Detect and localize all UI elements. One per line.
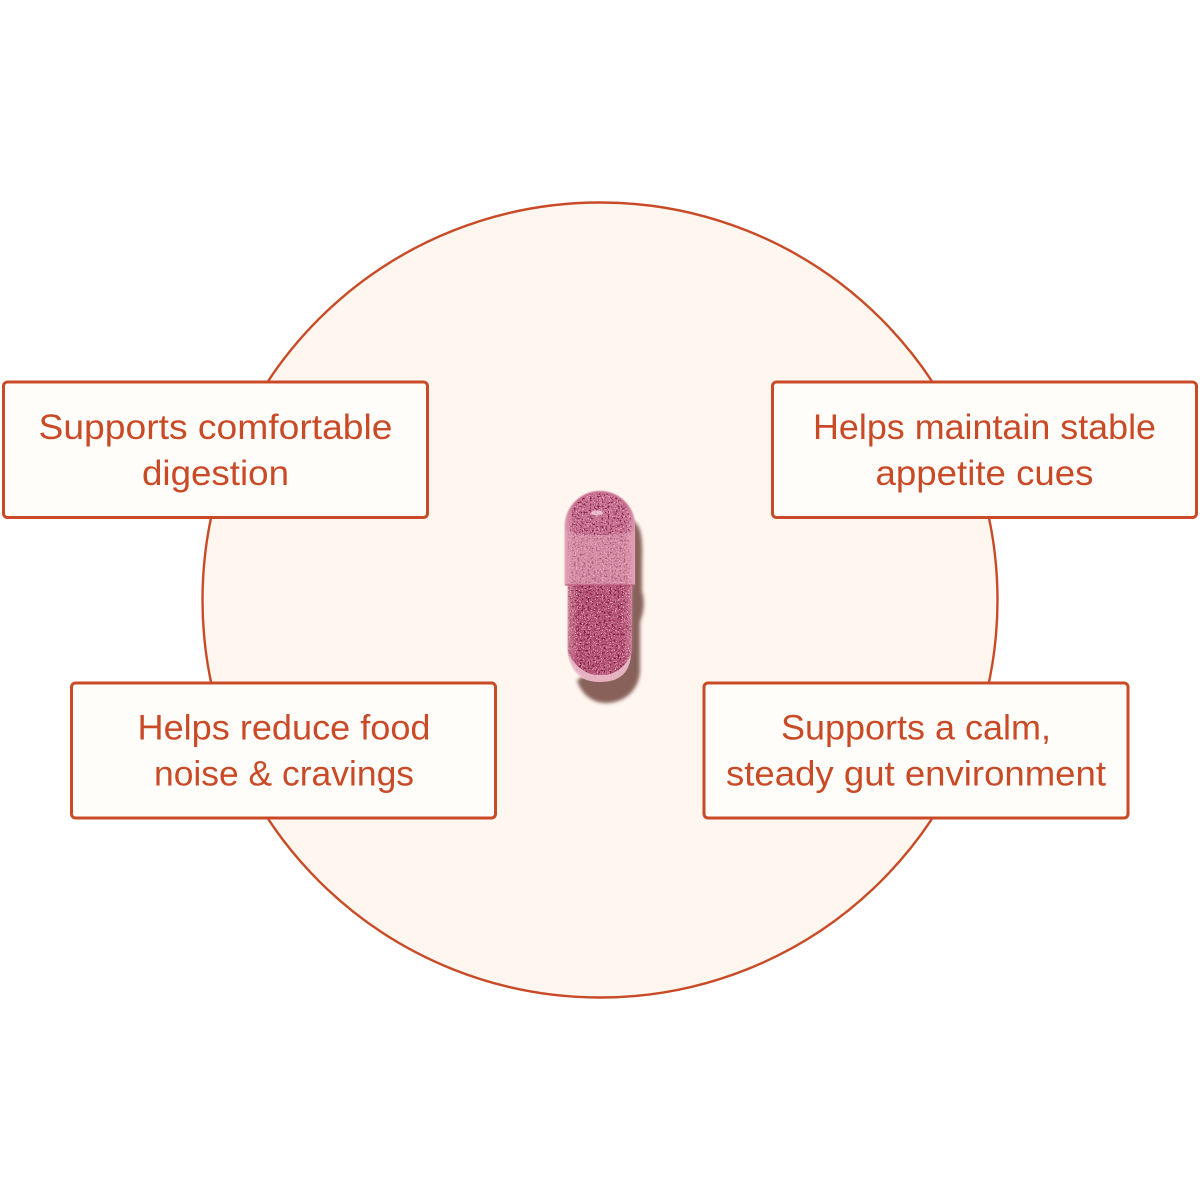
box: supports a calm steady gut environment: Supports a calm, [781,708,1051,748]
box: helps maintain stable appetite cues [772,382,1196,518]
box: supports a calm steady gut environment [704,683,1128,818]
box: supports comfortable digestion [4,382,428,518]
box: supports a calm steady gut environment: steady gut environment [726,754,1106,794]
capsule image [565,491,644,703]
capsule sheen [565,531,635,585]
box: helps reduce food noise and cravings: Helps reduce food [138,708,430,748]
capsule shadow [577,521,644,703]
box: helps reduce food noise and cravings: noise & cravings [154,754,414,794]
capsule body [565,491,635,682]
box: helps maintain stable appetite cues: appetite cues [876,454,1094,493]
box: helps maintain stable appetite cues: Helps maintain stable [813,408,1156,447]
box: helps reduce food noise and cravings [72,683,496,818]
box: supports comfortable digestion: digestion [142,454,289,493]
box: supports comfortable digestion: Supports comfortable [38,408,392,447]
capsule glitter [568,491,632,682]
central circle [202,202,998,998]
